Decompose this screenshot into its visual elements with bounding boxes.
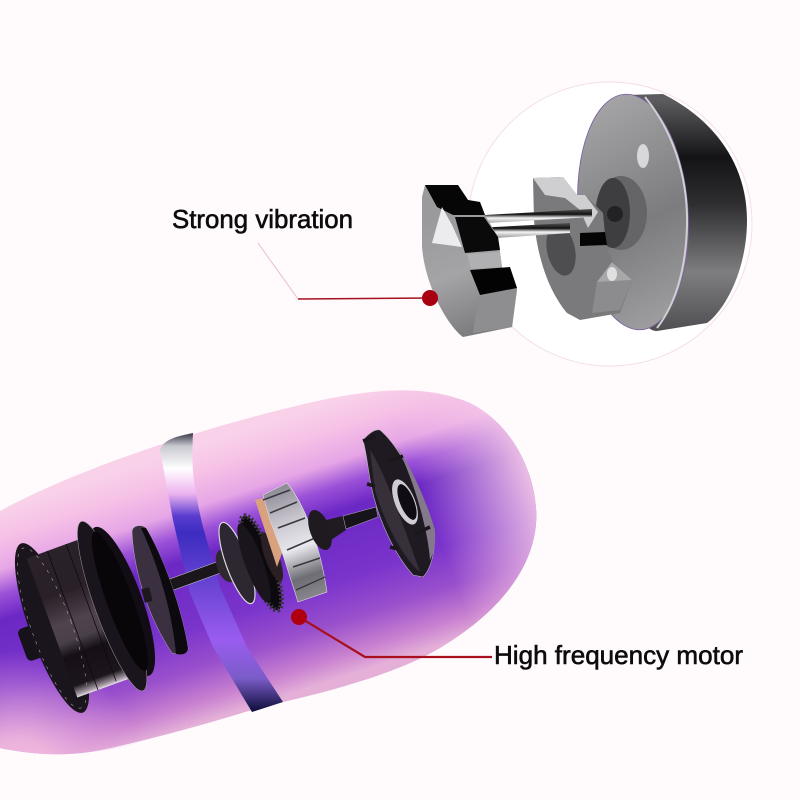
illustration: vibration weight assembly <box>422 90 747 337</box>
rear weight <box>533 177 632 320</box>
shaft stub <box>141 587 153 603</box>
gear pack <box>212 512 289 614</box>
callout dot: Strong vibration <box>422 290 438 306</box>
capsule metal band <box>160 433 283 712</box>
end plate <box>363 430 435 577</box>
front weight <box>422 185 517 337</box>
bearing collar <box>212 547 240 585</box>
rear collar <box>326 516 346 540</box>
callout line: High frequency motor <box>299 617 492 657</box>
hub <box>595 176 647 250</box>
label: Strong vibration: Strong vibration <box>172 204 353 234</box>
copper commutator <box>255 498 282 567</box>
disc <box>132 526 188 654</box>
rear connector flange <box>303 507 337 553</box>
face pin hole <box>637 144 649 168</box>
white circle inset <box>468 82 752 366</box>
motor assembly: exploded view <box>1 430 435 720</box>
motor housing <box>1 511 172 720</box>
threaded shaft end <box>343 507 378 529</box>
label: High frequency motor: High frequency motor <box>494 640 743 670</box>
shaft rods <box>470 209 592 224</box>
rotor slots <box>263 490 325 590</box>
drum face <box>570 90 696 334</box>
callout line: Strong vibration <box>258 243 430 299</box>
shaft <box>167 560 226 591</box>
end stub <box>17 621 53 662</box>
drum body <box>625 94 747 331</box>
callout dot: High frequency motor <box>291 609 307 625</box>
rotor <box>263 483 327 602</box>
capsule body <box>0 390 536 754</box>
